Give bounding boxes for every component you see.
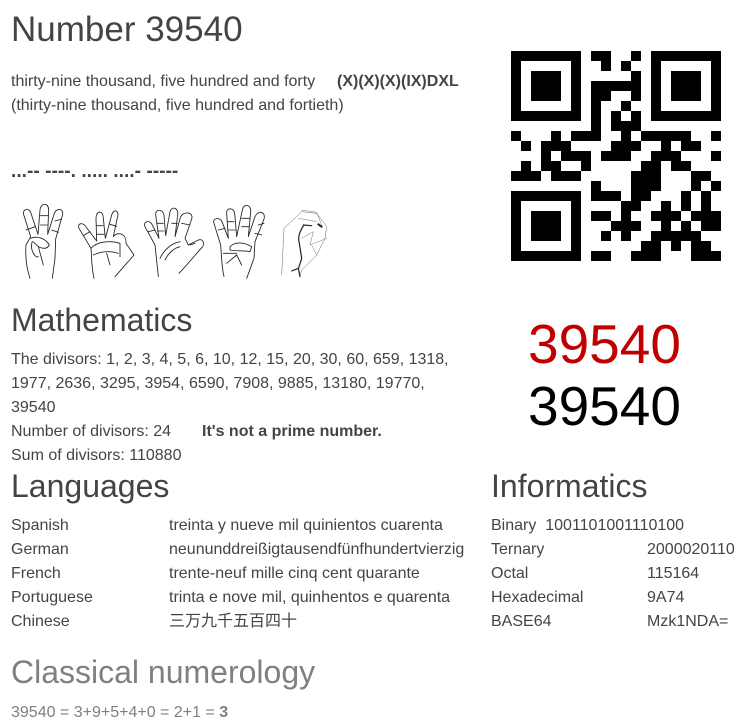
informatics table: 115164 xyxy=(647,565,699,582)
number of divisors: Number of divisors: 24 xyxy=(11,423,171,440)
languages table: 三万九千五百四十 xyxy=(169,613,297,630)
informatics table: Hexadecimal xyxy=(491,589,583,606)
heading: Mathematics: Mathematics xyxy=(11,302,192,338)
informatics table: Ternary xyxy=(491,541,544,558)
QR code xyxy=(511,51,721,261)
informatics table: 2000020110 xyxy=(647,541,735,558)
icon: sign language hands xyxy=(23,204,327,279)
red number: 39540 xyxy=(528,313,681,375)
black number: 39540 xyxy=(528,375,681,437)
numerology calculation: 39540 = 3+9+5+4+0 = 2+1 = 3 xyxy=(11,704,228,721)
hand sign 3 xyxy=(23,204,63,278)
number in words: (thirty-nine thousand, five hundred and fortieth) xyxy=(11,97,344,114)
number in words: thirty-nine thousand, five hundred and forty xyxy=(11,73,315,90)
informatics table: Binary 1001101001110100 xyxy=(491,517,684,534)
languages table: treinta y nueve mil quinientos cuarenta xyxy=(169,517,443,534)
divisors list: 39540 xyxy=(11,399,56,416)
heading: Informatics: Informatics xyxy=(491,468,647,504)
languages table: German xyxy=(11,541,69,558)
languages table: Spanish xyxy=(11,517,69,534)
informatics table xyxy=(491,517,735,630)
languages table: French xyxy=(11,565,61,582)
prime status: It's not a prime number. xyxy=(202,423,382,440)
morse code: ...-- ----. ..... ....- ----- xyxy=(11,161,178,182)
hand sign 9 xyxy=(79,211,134,278)
languages table: Chinese xyxy=(11,613,70,630)
informatics table: Mzk1NDA= xyxy=(647,613,728,630)
languages table xyxy=(11,517,464,630)
hand sign 0 xyxy=(282,210,327,277)
languages table: neununddreißigtausendfünfhundertvierzig xyxy=(169,541,464,558)
divisors list: 1977, 2636, 3295, 3954, 6590, 7908, 9885, 13180, 19770, xyxy=(11,375,425,392)
divisors list: The divisors: 1, 2, 3, 4, 5, 6, 10, 12, 15, 20, 30, 60, 659, 1318, xyxy=(11,351,449,368)
divisors list xyxy=(11,351,449,416)
informatics table: 9A74 xyxy=(647,589,684,606)
heading: Classical numerology: Classical numerology xyxy=(11,654,315,690)
heading: Languages: Languages xyxy=(11,468,169,504)
languages table: trente-neuf mille cinq cent quarante xyxy=(169,565,420,582)
hand sign 4 xyxy=(214,205,264,278)
title: Number 39540 xyxy=(11,10,243,49)
hand sign 5 xyxy=(145,208,204,277)
languages table: trinta e nove mil, quinhentos e quarenta xyxy=(169,589,450,606)
languages table: Portuguese xyxy=(11,589,93,606)
informatics table: Octal xyxy=(491,565,528,582)
roman numeral: (X)(X)(X)(IX)DXL xyxy=(337,73,459,90)
informatics table: BASE64 xyxy=(491,613,551,630)
sum of divisors: Sum of divisors: 110880 xyxy=(11,447,181,464)
number in words xyxy=(11,73,344,114)
